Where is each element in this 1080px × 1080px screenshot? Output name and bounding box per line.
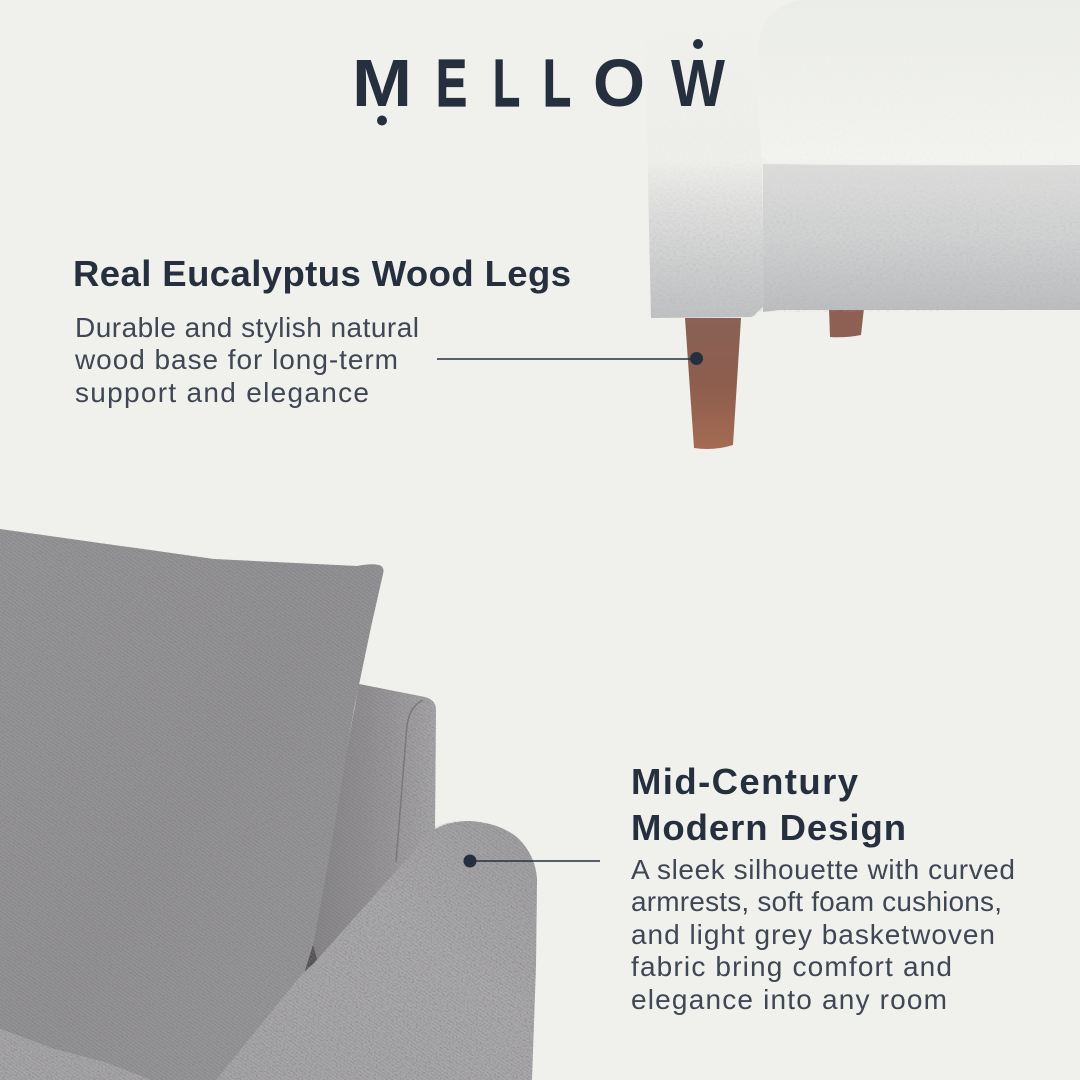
heading: Mid-Century Modern Design — [631, 761, 906, 848]
logo: MELLOW: W — [671, 46, 726, 121]
heading: Mid-Century Modern Design: Mid-Century — [631, 761, 859, 802]
text block: design description: armrests, soft foam cushions, — [631, 886, 1002, 917]
image: sofa corner with wooden legs — [640, 0, 1080, 449]
twill weave — [306, 706, 463, 970]
text block: design description: elegance into any room — [631, 984, 947, 1015]
image: grey sofa cushion and armrest — [0, 520, 540, 1080]
front wooden leg — [685, 318, 741, 449]
fabric texture upper — [649, 188, 1078, 316]
text block: design description: fabric bring comfort and — [631, 951, 952, 982]
back arm seam — [396, 700, 423, 862]
logo: MELLOW: L — [543, 46, 571, 121]
logo: MELLOW — [352, 39, 726, 126]
text block: wood legs description — [74, 312, 419, 408]
sofa rear leg — [829, 308, 864, 337]
text block: design description — [631, 854, 1015, 1015]
text block: wood legs description: support and elegance — [75, 377, 369, 408]
logo: MELLOW: E — [436, 46, 467, 121]
heading: Mid-Century Modern Design: Modern Design — [631, 807, 906, 848]
sofa seat base — [763, 164, 1080, 312]
logo: MELLOW: L — [493, 46, 520, 121]
text block: design description: A sleek silhouette with curved — [631, 854, 1015, 885]
fabric texture — [0, 520, 540, 1080]
text block: design description: and light grey basketwoven — [631, 919, 995, 950]
seat below cushion — [0, 1029, 150, 1080]
text block: wood legs description: Durable and stylish natural — [75, 312, 419, 343]
logo: MELLOW: M — [352, 46, 412, 121]
sofa arm — [644, 0, 764, 318]
back arm — [290, 684, 436, 990]
callout: leg pointer — [437, 352, 703, 365]
armrest — [216, 821, 537, 1080]
heading: Real Eucalyptus Wood Legs: Real Eucalyptus Wood Legs — [73, 253, 571, 294]
callout: armrest pointer — [464, 854, 600, 868]
back cushion — [0, 529, 384, 1080]
sofa seat cushion — [758, 0, 1080, 165]
shadow wedge — [303, 945, 318, 982]
logo: MELLOW: O — [593, 46, 645, 121]
text block: wood legs description: wood base for long-term — [74, 344, 398, 375]
